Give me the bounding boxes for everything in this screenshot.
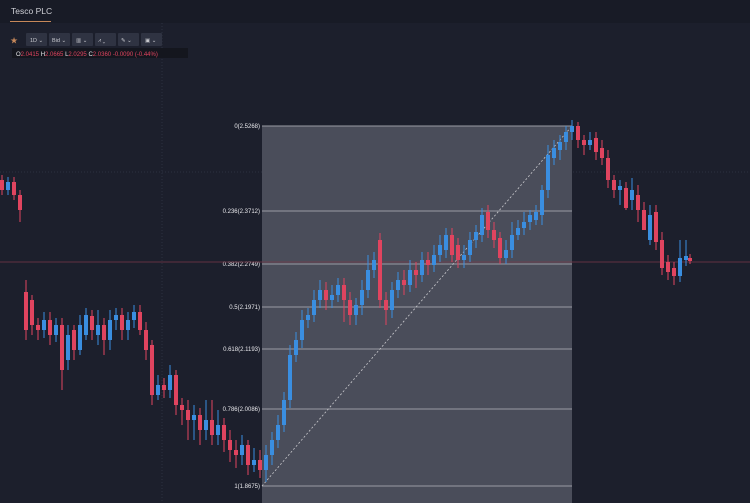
toolbar bbox=[10, 33, 162, 46]
header bar bbox=[0, 0, 750, 23]
toolbar: Bid ⌄ bbox=[52, 38, 66, 44]
candlesticks bbox=[0, 120, 692, 482]
toolbar: ✎ ⌄ bbox=[121, 37, 132, 44]
fib labels: 0(2.5268) bbox=[234, 124, 260, 130]
fib labels: 1(1.8675) bbox=[234, 484, 260, 490]
title: Tesco PLC bbox=[11, 6, 52, 16]
toolbar: ⩘ ⌄ bbox=[98, 38, 106, 44]
toolbar: 1D ⌄ bbox=[30, 38, 43, 44]
fib labels bbox=[223, 124, 260, 490]
fib labels: 0.618(2.1193) bbox=[223, 347, 260, 353]
OHLC readout: O2.0415 H2.0665 L2.0295 C2.0360 -0.0090 (-0.44%) bbox=[16, 52, 158, 58]
fib labels: 0.382(2.2749) bbox=[223, 262, 260, 268]
fib labels: 0.786(2.0086) bbox=[223, 407, 260, 413]
OHLC readout bbox=[12, 48, 188, 58]
fib labels: 0.5(2.1971) bbox=[229, 305, 260, 311]
toolbar: ▣ ⌄ bbox=[145, 38, 156, 44]
toolbar: ▥ ⌄ bbox=[76, 38, 87, 44]
fib labels: 0.236(2.3712) bbox=[223, 209, 260, 215]
icon: star: ★ bbox=[10, 36, 18, 46]
fibonacci box bbox=[262, 126, 572, 503]
